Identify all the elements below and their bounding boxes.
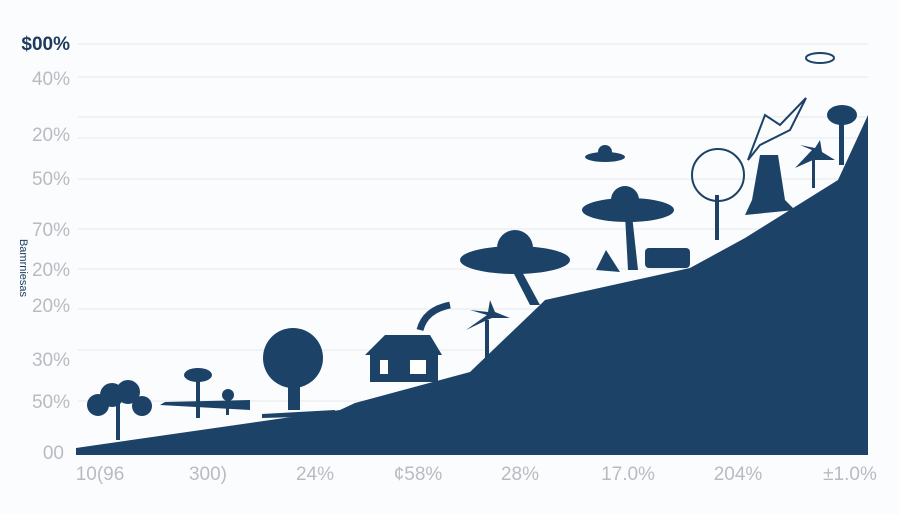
x-axis labels: ¢58% — [394, 464, 442, 485]
icon: plane — [806, 53, 834, 63]
x-axis labels: ±1.0% — [823, 464, 877, 485]
icon: globe tree — [692, 149, 744, 240]
y-axis labels: 20% — [32, 296, 70, 317]
x-axis labels: 204% — [714, 464, 762, 485]
y-axis labels: $00% — [21, 34, 70, 55]
icon: tower — [745, 155, 795, 215]
y-axis labels: 20% — [32, 125, 70, 146]
icon: acacia 2 — [582, 186, 674, 272]
x-axis labels — [76, 464, 877, 485]
icon: rocket — [827, 105, 857, 165]
icon: birds — [748, 98, 806, 160]
y-axis labels: 40% — [32, 69, 70, 90]
icon: tree 1 — [87, 380, 152, 440]
x-axis labels: 10(96 — [76, 464, 124, 485]
y-axis labels: 50% — [32, 169, 70, 190]
icons — [87, 53, 857, 440]
icon: acacia — [460, 230, 570, 305]
icon: palm — [466, 300, 510, 360]
x-axis labels: 17.0% — [601, 464, 655, 485]
icon: small trees — [160, 368, 250, 418]
area chart — [76, 115, 868, 455]
icon: big tree — [262, 328, 335, 418]
y-axis labels: 00 — [43, 443, 64, 464]
x-axis labels: 24% — [296, 464, 334, 485]
icon: cloud — [585, 152, 625, 162]
y-axis labels: 70% — [32, 220, 70, 241]
y-axis labels: 20% — [32, 260, 70, 281]
y-axis labels — [21, 34, 70, 464]
icon: car — [645, 248, 690, 268]
x-axis labels: 28% — [501, 464, 539, 485]
y-axis labels: 50% — [32, 392, 70, 413]
x-axis labels: 300) — [189, 464, 227, 485]
icon: house — [365, 305, 450, 382]
y-axis title: Bamrniesas — [17, 239, 29, 298]
y-axis labels: 30% — [32, 350, 70, 371]
icon: palm 2 — [795, 140, 835, 188]
